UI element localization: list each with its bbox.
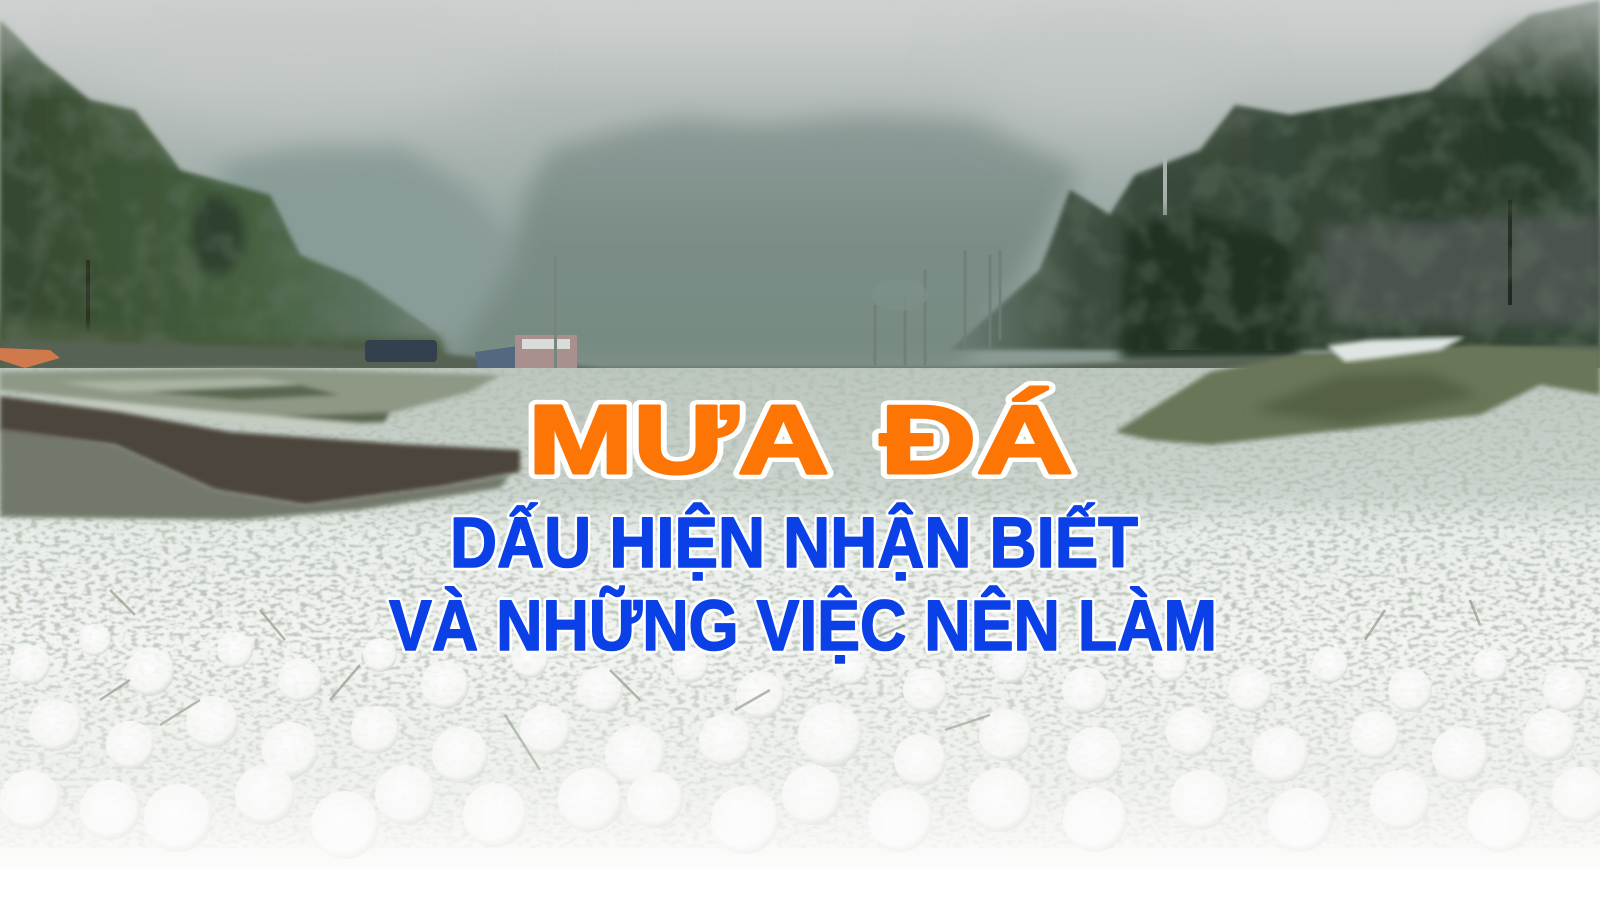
trees: misty bare trees in the valley [872,250,1000,365]
subtitle: two-line headline: VÀ NHỮNG VIỆC NÊN LÀM [389,586,1217,666]
dark earthen bank [0,396,520,505]
fog layer: upper haze [0,0,1600,125]
title: MƯA ĐÁ: MƯA [528,385,829,494]
subtitle: two-line headline: VÀ NHỮNG VIỆC NÊN LÀM [389,586,1217,666]
subtitle: two-line headline: DẤU HIỆN NHẬN BIẾT [450,503,1138,583]
tarp on the mound [1327,337,1465,362]
left terraced patch [0,368,500,430]
ground: dark strip below the hills [0,340,1600,400]
lower left grassy patch [0,428,510,520]
title: MƯA ĐÁ: ĐÁ [880,385,1073,494]
title: MƯA ĐÁ: MƯA [528,385,829,494]
background: foggy sky [0,0,1600,400]
fade: misty white base [0,680,1600,895]
mound: grassy hump at right [1115,345,1600,445]
subtitle: two-line headline: DẤU HIỆN NHẬN BIẾT [450,503,1138,583]
foreground hailstones [0,624,1600,859]
subtitle: two-line headline [389,503,1217,666]
background: distant misty mountains [215,115,1080,370]
title: MƯA ĐÁ: ĐÁ [880,385,1073,494]
grass stalks among hailstones [100,590,1480,770]
hill: right forested slope with rocks [950,0,1600,360]
texture: scattered hailstones [0,368,1600,848]
title block [389,385,1217,666]
title: MƯA ĐÁ [528,385,1073,494]
hill: left forested slope [0,20,450,370]
tents and vehicles at the field edge [0,255,577,382]
texture: foliage on hills [2,34,1598,350]
field: hail-covered ground [0,368,1600,868]
